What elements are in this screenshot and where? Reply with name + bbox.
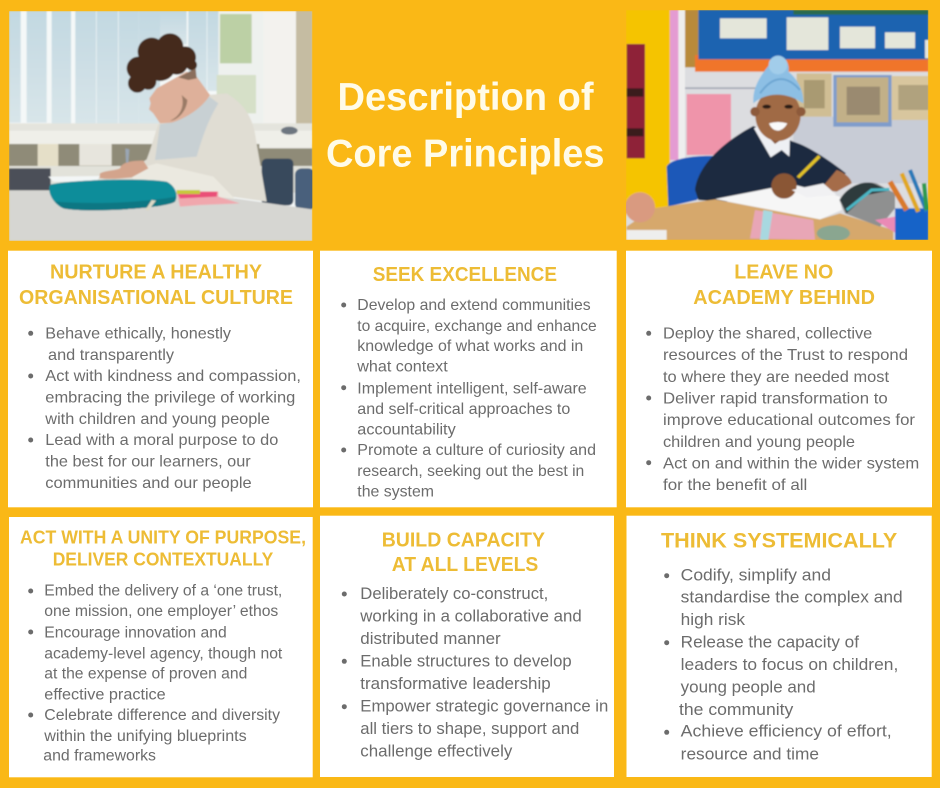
heading: BUILD CAPACITY — [382, 529, 545, 552]
bullet list: standardise the complex and — [681, 588, 903, 607]
bullet list: Behave ethically, honestly — [45, 325, 231, 342]
panel: act with a unity of purpose — [9, 517, 313, 777]
bullet list: research, seeking out the best in — [357, 463, 584, 480]
bullet list: Empower strategic governance in — [360, 697, 608, 716]
panel: leave no academy behind — [626, 251, 932, 507]
heading: AT ALL LEVELS — [392, 553, 538, 576]
bullet list: Codify, simplify and — [681, 566, 831, 585]
bullet list: Lead with a moral purpose to do — [45, 432, 278, 449]
bullet list — [341, 297, 597, 501]
bullet list — [28, 583, 283, 765]
bullet list: one mission, one employer’ ethos — [44, 603, 279, 620]
bullet list: communities and our people — [45, 475, 252, 492]
bullet list: the community — [679, 700, 794, 719]
bullet list: and frameworks — [43, 748, 156, 765]
bullet list: Enable structures to develop — [360, 652, 572, 671]
bullet list: the system — [357, 484, 434, 501]
bullet list: Celebrate difference and diversity — [44, 707, 280, 724]
heading: ORGANISATIONAL CULTURE — [19, 286, 293, 309]
title: Description of — [338, 76, 594, 119]
bullet list: Develop and extend communities — [357, 297, 591, 314]
heading — [20, 526, 306, 570]
bullet list: resources of the Trust to respond — [663, 347, 908, 364]
bullet list — [646, 325, 919, 494]
bullet list: high risk — [681, 610, 746, 629]
bullet list: Encourage innovation and — [44, 624, 227, 641]
heading: DELIVER CONTEXTUALLY — [53, 549, 274, 570]
bullet list: with children and young people — [44, 411, 270, 428]
bullet list: effective practice — [44, 686, 166, 703]
panel: build capacity at all levels — [320, 516, 614, 777]
bullet list: leaders to focus on children, — [681, 655, 898, 674]
heading: SEEK EXCELLENCE — [373, 263, 557, 286]
bullet list: Implement intelligent, self-aware — [357, 380, 587, 397]
bullet list: to acquire, exchange and enhance — [357, 318, 597, 335]
bullet list: the best for our learners, our — [45, 454, 251, 471]
heading: NURTURE A HEALTHY — [50, 260, 262, 284]
bullet list: Release the capacity of — [681, 633, 859, 652]
bullet list: and transparently — [48, 347, 174, 364]
bullet list: distributed manner — [360, 629, 501, 648]
panel: seek excellence — [320, 251, 617, 507]
bullet list: academy-level agency, though not — [44, 645, 283, 662]
panel: think systemically — [626, 516, 932, 777]
bullet list — [28, 325, 301, 492]
title: Core Principles — [326, 132, 604, 176]
photo: smiling boy in a classroom — [625, 10, 929, 241]
bullet list: young people and — [681, 678, 816, 697]
photo: student writing at a table — [9, 11, 315, 241]
bullet list: Deploy the shared, collective — [663, 325, 872, 342]
bullet list: embracing the privilege of working — [45, 390, 295, 407]
bullet list: Deliver rapid transformation to — [663, 390, 888, 407]
bullet list: children and young people — [663, 434, 855, 451]
panel: nurture a healthy organisational culture — [8, 251, 313, 507]
bullet list: Achieve efficiency of effort, — [681, 722, 892, 741]
bullet list: Embed the delivery of a ‘one trust, — [44, 583, 282, 600]
bullet list: challenge effectively — [360, 742, 513, 761]
heading — [693, 260, 875, 309]
heading: ACT WITH A UNITY OF PURPOSE, — [20, 526, 306, 547]
bullet list: all tiers to shape, support and — [360, 719, 579, 738]
bullet list: within the unifying blueprints — [43, 728, 247, 745]
bullet list: Deliberately co-construct, — [360, 584, 548, 603]
bullet list: improve educational outcomes for — [663, 412, 916, 429]
bullet list: for the benefit of all — [663, 477, 807, 494]
bullet list: what context — [356, 359, 448, 376]
bullet list: knowledge of what works and in — [357, 338, 583, 355]
bullet list — [342, 584, 608, 761]
bullet list: Promote a culture of curiosity and — [357, 442, 596, 459]
heading — [19, 260, 293, 309]
heading: ACADEMY BEHIND — [693, 286, 875, 309]
bullet list — [664, 566, 903, 763]
bullet list: accountability — [357, 421, 456, 438]
heading: THINK SYSTEMICALLY — [661, 530, 897, 553]
title — [326, 76, 604, 176]
bullet list: to where they are needed most — [663, 369, 890, 386]
bullet list: and self-critical approaches to — [357, 401, 570, 418]
heading — [382, 529, 545, 576]
heading: LEAVE NO — [734, 260, 833, 284]
bullet list: resource and time — [681, 744, 819, 763]
bullet list: Act with kindness and compassion, — [45, 368, 301, 385]
bullet list: transformative leadership — [360, 674, 551, 693]
bullet list: working in a collaborative and — [359, 607, 582, 626]
bullet list: Act on and within the wider system — [663, 455, 919, 472]
bullet list: at the expense of proven and — [44, 665, 247, 682]
